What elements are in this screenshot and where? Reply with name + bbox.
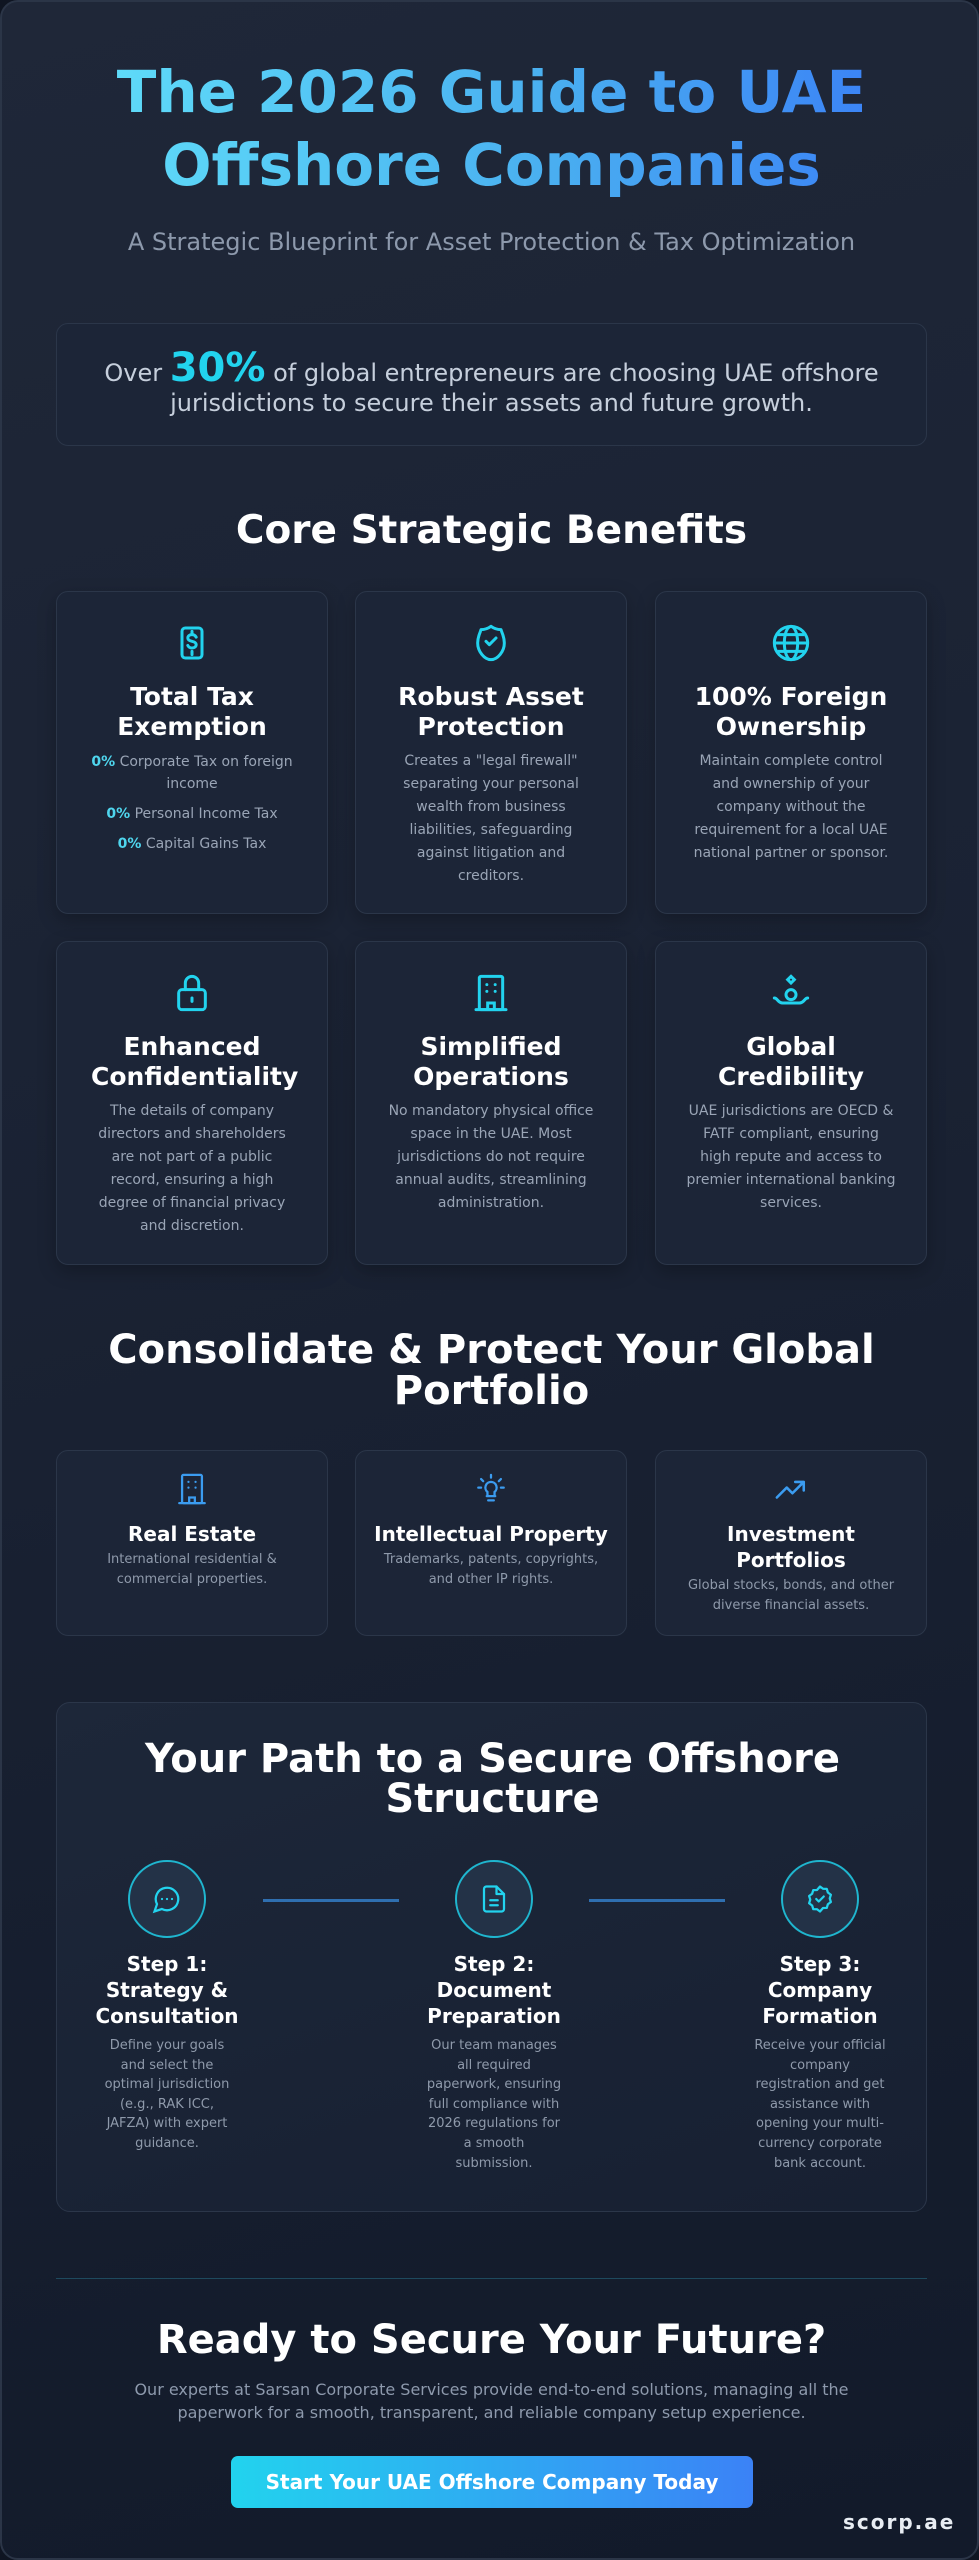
step 2: Step 2:: [454, 1952, 534, 1976]
text: space in the UAE. Most: [410, 1126, 572, 1142]
step 2: full compliance with: [429, 2097, 559, 2112]
heading: Robust Asset: [398, 682, 584, 711]
stat callout: [56, 323, 927, 446]
heading: Operations: [413, 1062, 569, 1091]
step 3: opening your multi-: [756, 2116, 884, 2131]
text: International residential & commercial properties.: [107, 1552, 277, 1587]
step 2: Preparation: [427, 2004, 561, 2028]
card: real estate: [56, 1450, 328, 1636]
text: Trademarks, patents, copyrights,: [384, 1552, 598, 1567]
card: asset protection: [355, 591, 627, 914]
icon: document: [455, 1860, 533, 1938]
step 1: guidance.: [135, 2136, 199, 2151]
step 3: Receive your official: [754, 2038, 886, 2053]
text: premier international banking: [687, 1172, 895, 1188]
heading: Portfolios: [736, 1548, 846, 1572]
text: No mandatory physical office: [389, 1103, 593, 1119]
text: CTA: [134, 2380, 849, 2422]
text: jurisdictions do not require: [397, 1149, 585, 1165]
step 1: Consultation: [95, 2004, 239, 2028]
icon: bulb: [477, 1474, 505, 1502]
heading: Total Tax: [130, 682, 254, 711]
text: [389, 1103, 593, 1211]
heading: [91, 1032, 298, 1091]
text: services.: [760, 1195, 822, 1211]
step 2: submission.: [455, 2156, 533, 2171]
step 3: registration and get: [755, 2077, 885, 2092]
text: Creates a "legal firewall" separating your personal wealth from business liabilities, safeguarding against litigation and creditors.: [403, 753, 579, 884]
text: Maintain complete control and ownership of your company without the requirement for a local UAE national partner or sponsor.: [694, 753, 888, 861]
text: UAE jurisdictions are OECD &: [689, 1103, 893, 1119]
heading: portfolio: [108, 1327, 875, 1414]
card: ownership: [655, 591, 927, 914]
text: 0% Personal Income Tax: [106, 806, 278, 822]
icon: badge check: [781, 1860, 859, 1938]
arrow: connector 2: [589, 1899, 725, 1902]
heading: Confidentiality: [91, 1062, 298, 1091]
step 2: 2026 regulations for: [428, 2116, 560, 2131]
step 1: Step 1:: [127, 1952, 207, 1976]
card: operations: [355, 941, 627, 1265]
icon: trend: [776, 1480, 806, 1499]
heading: 100% Foreign: [695, 682, 887, 711]
icon: dollar: [180, 626, 204, 660]
title: [2, 56, 979, 202]
icon: shield: [476, 624, 506, 662]
step 1: [95, 1860, 239, 2151]
button: Start Your UAE Offshore Company Today: [266, 2470, 718, 2494]
step 2: Our team manages: [431, 2038, 557, 2053]
button: [231, 2456, 753, 2508]
subtitle: A Strategic Blueprint for Asset Protection & Tax Optimization: [128, 228, 855, 256]
step 2: a smooth: [464, 2136, 524, 2151]
step 2: paperwork, ensuring: [427, 2077, 561, 2092]
step 2: Document: [437, 1978, 551, 2002]
step 1: Define your goals: [110, 2038, 224, 2053]
step 3: [754, 1860, 886, 2171]
text: CTA: Our experts at Sarsan Corporate Services provide end-to-end solutions, managing all the: [134, 2380, 849, 2399]
heading: Simplified: [420, 1032, 562, 1061]
heading: CTA: Ready to Secure Your Future?: [157, 2317, 826, 2363]
heading: Structure: [385, 1776, 600, 1822]
icon: globe: [772, 624, 810, 662]
heading: Real Estate: [128, 1522, 256, 1546]
heading: core benefits: Core Strategic Benefits: [236, 508, 747, 553]
heading: Your Path to a Secure Offshore: [145, 1736, 840, 1782]
heading: [413, 1032, 569, 1091]
heading: Investment: [727, 1522, 855, 1546]
step 1: Strategy &: [106, 1978, 228, 2002]
heading: Credibility: [718, 1062, 864, 1091]
step 2: [427, 1860, 561, 2171]
step 1: (e.g., RAK ICC,: [120, 2097, 214, 2112]
heading: portfolio: Portfolio: [394, 1368, 589, 1414]
heading: [727, 1522, 855, 1572]
text: 0% Capital Gains Tax: [118, 836, 266, 852]
text: annual audits, streamlining: [395, 1172, 587, 1188]
text: [91, 754, 293, 852]
text: Global stocks, bonds, and other diverse financial assets.: [688, 1578, 894, 1613]
title: The 2026 Guide to UAE: [117, 58, 866, 126]
heading: Global: [746, 1032, 836, 1061]
step 2: all required: [457, 2058, 531, 2073]
icon: building: [474, 974, 508, 1012]
heading: [398, 682, 584, 741]
heading: Ownership: [716, 712, 866, 741]
card: tax: [56, 591, 328, 914]
heading: Protection: [417, 712, 565, 741]
heading: Enhanced: [123, 1032, 260, 1061]
step 3: currency corporate: [758, 2136, 882, 2151]
text: 0% Corporate Tax on foreign income: [91, 754, 293, 792]
step 3: assistance with: [770, 2097, 870, 2112]
icon: chat: [128, 1860, 206, 1938]
step 3: Formation: [762, 2004, 878, 2028]
heading: Exemption: [117, 712, 267, 741]
text: administration.: [438, 1195, 544, 1211]
text: FATF compliant, ensuring: [703, 1126, 879, 1142]
text: CTA: paperwork for a smooth, transparent, and reliable company setup experience.: [177, 2403, 806, 2422]
step 3: bank account.: [774, 2156, 866, 2171]
arrow: connector 1: [263, 1899, 399, 1902]
card: confidentiality: [56, 941, 328, 1265]
step 1: JAFZA) with expert: [107, 2116, 227, 2131]
step 1: and select the: [121, 2058, 213, 2073]
step 3: company: [790, 2058, 850, 2073]
title: Offshore Companies: [162, 131, 821, 199]
heading: [144, 1736, 840, 1822]
text: The details of company directors and shareholders are not part of a public record, ensuring a high degree of financial privacy and discretion.: [98, 1103, 286, 1234]
text: high repute and access to: [700, 1149, 882, 1165]
step 1: optimal jurisdiction: [105, 2077, 229, 2092]
heading: [718, 1032, 864, 1091]
text: [687, 1103, 895, 1211]
icon: hand: [772, 974, 810, 1004]
heading: portfolio: Consolidate & Protect Your Global: [108, 1327, 875, 1373]
text: and other IP rights.: [429, 1572, 553, 1587]
panel: path: [56, 1702, 927, 2212]
heading: [695, 682, 887, 741]
icon: building: [178, 1474, 206, 1504]
heading: [117, 682, 267, 741]
heading: Intellectual Property: [374, 1522, 608, 1546]
card: IP: [355, 1450, 627, 1636]
icon: lock: [177, 974, 207, 1012]
card: credibility: [655, 941, 927, 1265]
step 3: Step 3:: [780, 1952, 860, 1976]
step 3: Company: [768, 1978, 872, 2002]
stat callout: Over 30% of global entrepreneurs are choosing UAE offshore: [104, 345, 879, 391]
card: investment: [655, 1450, 927, 1636]
stat callout: jurisdictions to secure their assets and future growth.: [170, 389, 813, 417]
text: [384, 1552, 598, 1587]
watermark: scorp.ae: [843, 2510, 955, 2534]
